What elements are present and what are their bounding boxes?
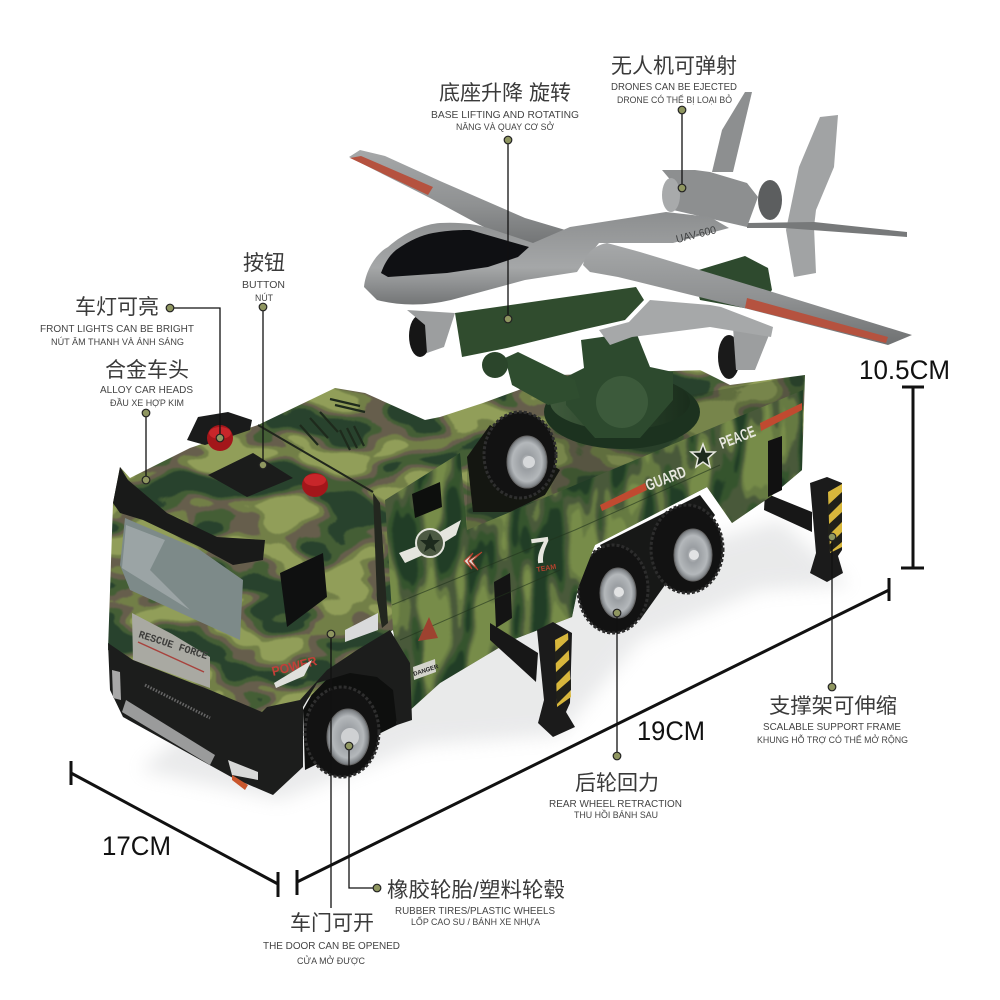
launcher rear bracket: [692, 256, 772, 310]
right landing gear: [718, 327, 771, 379]
dimension: width 17CM: 17CM: [102, 831, 171, 861]
wheel well: [303, 670, 397, 770]
callout: rubber tires: [345, 742, 565, 927]
bumper details: [112, 670, 258, 790]
callout: front lights: 车灯可亮: [75, 296, 159, 319]
callout: rear wheel retraction: REAR WHEEL RETRACTION: [549, 798, 682, 810]
cab roof seam: [258, 425, 373, 492]
callout: base lifting: NÂNG VÀ QUAY CƠ SỞ: [456, 121, 554, 132]
dimension: length 19CM: 19CM: [637, 716, 705, 746]
roof lights: [207, 425, 328, 497]
rear wheels: [578, 495, 723, 633]
callout: support frame: KHUNG HỖ TRỢ CÓ THỂ MỞ RỘNG: [757, 734, 908, 745]
roof button: [208, 453, 293, 497]
callout: rear wheel retraction: [549, 609, 682, 820]
callout: door opens: CỬA MỞ ĐƯỢC: [297, 955, 365, 966]
rear outrigger: [764, 477, 843, 582]
dimension: length 19CM: [297, 578, 889, 895]
right tail fin: [786, 115, 838, 277]
callout: alloy car heads: ALLOY CAR HEADS: [100, 384, 193, 396]
bumper and wheel arch: [108, 630, 412, 795]
fuselage: [364, 212, 729, 304]
callout: alloy car heads: [100, 359, 193, 484]
callout: rubber tires: RUBBER TIRES/PLASTIC WHEELS: [395, 905, 555, 917]
guard peace lettering: PEACE: [717, 424, 758, 453]
callout: door opens: THE DOOR CAN BE OPENED: [263, 940, 400, 952]
left tail fin: [712, 92, 752, 172]
callout: base lifting: BASE LIFTING AND ROTATING: [431, 109, 579, 121]
spare wheel: [484, 412, 556, 498]
dimension: height 10.5CM: 10.5CM: [859, 355, 950, 385]
upper side window: [412, 482, 442, 518]
callout: drones ejected: [611, 55, 737, 192]
side stripes and panels: [392, 403, 802, 640]
right wing: [583, 243, 912, 345]
outrigger slot front: [494, 573, 512, 628]
callout: support frame: SCALABLE SUPPORT FRAME: [763, 721, 901, 733]
danger decal: [413, 617, 440, 680]
callout: rubber tires: 橡胶轮胎/塑料轮毂: [387, 879, 565, 902]
power decal: POWER: [270, 653, 319, 679]
uav label: UAV-600: [675, 224, 718, 246]
outrigger slot rear: [768, 436, 782, 497]
callout: rear wheel retraction: THU HỒI BÁNH SAU: [574, 809, 658, 820]
dimension: width 17CM: [71, 761, 278, 897]
callout: drones ejected: 无人机可弹射: [611, 55, 737, 78]
callout: front lights: [40, 296, 224, 442]
turret base: [482, 332, 700, 449]
guard peace lettering: 7: [528, 529, 554, 572]
visor: [113, 467, 265, 565]
callout: drones ejected: DRONE CÓ THỂ BỊ LOẠI BỎ: [617, 94, 732, 105]
callout: base lifting: [431, 82, 579, 323]
door window: [280, 553, 327, 627]
callout: base lifting: 底座升降 旋转: [439, 82, 571, 105]
guard peace lettering: [528, 424, 758, 574]
front outrigger: [490, 622, 575, 737]
left wing: [349, 150, 572, 250]
guard peace lettering: GUARD: [643, 464, 689, 495]
dimension: height 10.5CM: [859, 355, 950, 568]
horizontal stabilizer: [747, 222, 907, 237]
callout: button: [242, 252, 285, 469]
callout: alloy car heads: 合金车头: [105, 359, 189, 382]
callout: drones ejected: DRONES CAN BE EJECTED: [611, 81, 737, 93]
grille plate: [132, 613, 210, 688]
callout: door opens: 车门可开: [290, 912, 374, 935]
callout: button: BUTTON: [242, 279, 285, 291]
callout: rear wheel retraction: 后轮回力: [575, 772, 659, 795]
toy truck: [60, 332, 860, 795]
truck body camouflage: [108, 370, 805, 712]
callout: door opens: [263, 630, 400, 966]
side wall streaked camouflage: [385, 390, 803, 709]
deck opening: [467, 425, 560, 512]
launcher and drone: [349, 92, 912, 379]
engine: [662, 170, 782, 227]
callout: alloy car heads: ĐẦU XE HỢP KIM: [110, 398, 184, 408]
wing emblem: [399, 520, 461, 563]
callout: button: 按钮: [243, 252, 285, 275]
launcher rail: [455, 287, 644, 357]
door step chrome: [345, 613, 378, 642]
cab pillar: [373, 493, 388, 628]
windshield: [120, 518, 243, 640]
missile: [599, 300, 773, 345]
deck surface shading: [467, 375, 805, 530]
callout: rubber tires: LỐP CAO SU / BÁNH XE NHỰA: [411, 916, 540, 927]
callout: front lights: NÚT ÂM THANH VÀ ÁNH SÁNG: [51, 337, 184, 347]
guard peace lettering: TEAM: [536, 564, 557, 574]
canopy: [381, 230, 529, 277]
chevron marking: [464, 552, 482, 570]
grille plate: RESCUE FORCE: [137, 629, 209, 663]
callout: support frame: 支撑架可伸缩: [769, 695, 897, 718]
right wing red strip: [745, 298, 888, 343]
left wing red strip: [350, 156, 433, 195]
left landing gear: [407, 310, 455, 357]
roof block vents: [300, 399, 365, 450]
danger decal: DANGER: [413, 664, 440, 678]
ground shadow: [140, 520, 850, 800]
callout: support frame: [757, 533, 908, 745]
front wheel: [305, 687, 379, 777]
callout: button: NÚT: [255, 293, 273, 303]
roof mirror: [187, 412, 252, 445]
callout: front lights: FRONT LIGHTS CAN BE BRIGHT: [40, 323, 195, 335]
